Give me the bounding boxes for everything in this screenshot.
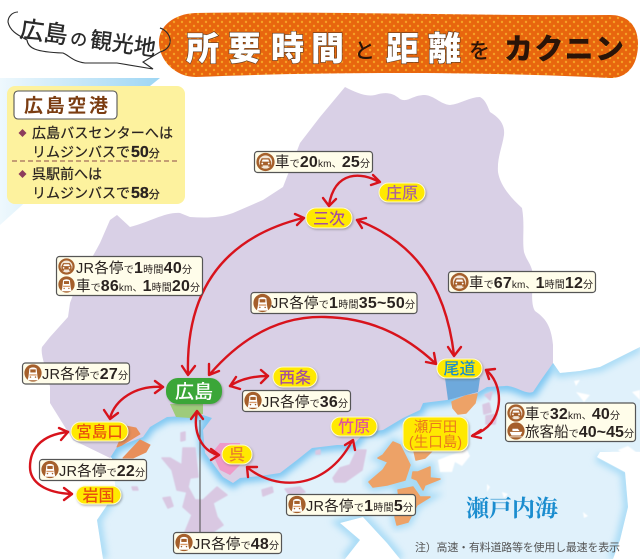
time box: Miyoshi to Onomichi by car: 車で67km、1時間12分 bbox=[469, 275, 593, 292]
airport route 2: 呉駅前へは bbox=[32, 166, 102, 182]
title: speech bubble: 広島の観光地 bbox=[18, 16, 158, 62]
label: Setoda (Ikuchijima): 瀬戸田 bbox=[414, 419, 457, 436]
time box: to Miyoshi bbox=[56, 256, 202, 296]
title: orange banner: カクニン bbox=[504, 33, 624, 66]
time box: Saijo bbox=[242, 390, 350, 412]
label: Saijo bbox=[273, 367, 317, 387]
area: Kure bbox=[212, 443, 242, 475]
purple islands bbox=[132, 392, 497, 532]
arrow: Hiroshima - Kure bbox=[191, 411, 219, 460]
time box: Miyajimaguchi bbox=[22, 363, 130, 384]
airport route 1 bbox=[18, 125, 173, 161]
airport heading: 広島空港 bbox=[24, 95, 108, 117]
area: Onomichi bbox=[445, 378, 480, 400]
time box: to Onomichi by JR: JR各停で1時間35~50分 bbox=[271, 295, 415, 312]
title: orange banner bbox=[159, 13, 638, 78]
label: Shobara: 庄原 bbox=[386, 184, 418, 202]
label: Takehara: 竹原 bbox=[338, 418, 370, 436]
title: orange banner: 離 bbox=[428, 30, 461, 67]
time box: Iwakuni bbox=[40, 460, 146, 480]
title: orange banner: 距 bbox=[386, 30, 419, 67]
airport route 1: 広島バスセンターへは bbox=[32, 125, 173, 141]
label: Iwakuni: 岩国 bbox=[82, 487, 115, 505]
label: Kure: 呉 bbox=[229, 446, 245, 464]
arrow: Shobara - Miyoshi bbox=[323, 175, 380, 206]
label: Shobara bbox=[379, 183, 425, 202]
label: Setoda (Ikuchijima) bbox=[403, 417, 468, 451]
label: Miyoshi: 三次 bbox=[313, 210, 345, 228]
time box: to Miyoshi: 車で86km、1時間20分 bbox=[76, 278, 200, 295]
time box: Setoda: 車で32km、40分 bbox=[525, 406, 620, 423]
label: Onomichi bbox=[437, 359, 482, 378]
title: orange banner: 所 bbox=[186, 30, 219, 67]
label: Miyajimaguchi: 宮島口 bbox=[76, 423, 123, 441]
time box: Iwakuni: JR各停で22分 bbox=[59, 463, 145, 480]
time box: Kure bbox=[174, 532, 282, 554]
label: Miyoshi bbox=[306, 208, 352, 228]
label: Setoda (Ikuchijima): (生口島) bbox=[409, 434, 462, 451]
area: Miyajima bbox=[117, 426, 150, 458]
time box: car to Shobara: 車で20km、25分 bbox=[275, 154, 370, 171]
time box: Miyoshi to Onomichi by car bbox=[448, 272, 596, 292]
label: Takehara bbox=[331, 417, 377, 436]
time box: Setoda: 旅客船で40~45分 bbox=[525, 424, 634, 441]
time box: to Miyoshi: JR各停で1時間40分 bbox=[76, 260, 192, 277]
arrow: Hiroshima - Onomichi bbox=[209, 317, 436, 375]
title: orange banner: 時 bbox=[271, 30, 304, 67]
sea: upper left bbox=[0, 78, 160, 225]
label: Hiroshima: 広島 bbox=[175, 381, 213, 403]
airport route 1: リムジンバスで50分 bbox=[32, 144, 160, 161]
label: Iwakuni bbox=[76, 486, 121, 505]
label: Kure bbox=[222, 445, 252, 464]
time box: Miyajimaguchi: JR各停で27分 bbox=[42, 366, 128, 383]
airport heading bbox=[14, 91, 117, 119]
time box: car to Shobara bbox=[254, 152, 372, 172]
label: Hiroshima bbox=[166, 378, 222, 404]
land: mainland Hiroshima bbox=[42, 87, 553, 483]
sea name: 瀬戸内海 bbox=[466, 496, 558, 521]
arrow: Hiroshima - Miyoshi bbox=[182, 214, 304, 375]
arrow: Hiroshima - Miyajimaguchi bbox=[104, 381, 163, 419]
title: orange banner: 間 bbox=[311, 30, 344, 67]
title: speech bubble bbox=[8, 12, 170, 69]
title: orange banner: と bbox=[354, 40, 375, 63]
arrow: Miyoshi - Onomichi bbox=[357, 218, 461, 356]
airport route 2 bbox=[18, 166, 160, 202]
time box: Saijo: JR各停で36分 bbox=[262, 394, 348, 411]
time box: Takehara: JR各停で1時間5分 bbox=[306, 498, 413, 515]
arrow: Miyajimaguchi - Iwakuni bbox=[30, 428, 72, 500]
label: Onomichi: 尾道 bbox=[443, 360, 476, 378]
gray connector line bbox=[199, 420, 201, 532]
title: orange banner: を bbox=[469, 40, 490, 63]
area: Hiroshima city bbox=[170, 404, 203, 418]
time box: Setoda bbox=[506, 403, 636, 442]
time box: Takehara bbox=[286, 494, 416, 516]
arrow: Onomichi - Setoda bbox=[472, 369, 499, 438]
title: orange banner: 要 bbox=[228, 30, 261, 67]
orange islands: Setouchi bbox=[369, 394, 477, 525]
footnote: 注）高速・有料道路等を使用し最速を表示 bbox=[415, 540, 620, 554]
white islands bbox=[438, 380, 640, 518]
sea: Seto Inland Sea bbox=[73, 347, 640, 559]
time box: Kure: JR各停で48分 bbox=[193, 536, 279, 553]
label: Saijo: 西条 bbox=[279, 369, 311, 387]
arrow: Kure - Takehara bbox=[247, 440, 355, 483]
airport route 2: リムジンバスで58分 bbox=[32, 185, 160, 202]
panel: Hiroshima Airport bbox=[7, 86, 185, 204]
arrow: Hiroshima - Saijo bbox=[230, 370, 268, 389]
